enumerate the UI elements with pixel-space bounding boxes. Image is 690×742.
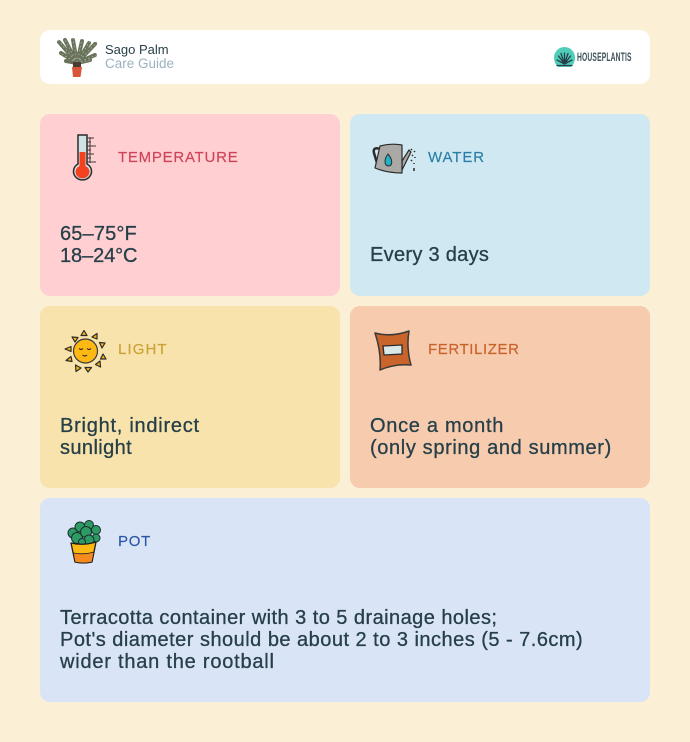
text: water frequency: Every 3 days: [370, 244, 489, 266]
title: Sago Palm: Sago Palm: [105, 42, 169, 57]
text: pot guidance: wider than the rootball: [60, 651, 275, 673]
panel: fertilizer: [350, 306, 650, 488]
heading: fertilizer: FERTILIZER: [428, 341, 520, 358]
logo wordmark: HOUSEPLANTIS: [577, 50, 632, 64]
heading: light: LIGHT: [118, 341, 168, 358]
text: pot guidance: Pot's diameter should be about 2 to 3 inches (5 - 7.6cm): [60, 629, 583, 651]
text: pot guidance: [60, 607, 583, 673]
panel: temperature: [40, 114, 340, 296]
icon: potted plant: [68, 520, 101, 564]
subtitle: Care Guide: Care Guide: [105, 56, 174, 71]
header bar: [40, 30, 650, 84]
icon: sun: [64, 330, 107, 373]
icon: Houseplantis logo: [554, 47, 575, 67]
text: light requirement: sunlight: [60, 437, 132, 459]
panel: pot: [40, 498, 650, 702]
text: fertilizer schedule: [370, 415, 612, 459]
text: fertilizer schedule: Once a month: [370, 415, 504, 437]
text: temperature range: 18–24°C: [60, 245, 137, 267]
text: temperature range: [60, 223, 137, 267]
heading: water: WATER: [428, 149, 485, 166]
text: temperature range: 65–75°F: [60, 223, 137, 245]
icon: fertilizer bag: [374, 330, 412, 371]
icon: watering can: [372, 144, 416, 174]
text: light requirement: Bright, indirect: [60, 415, 200, 437]
heading: pot: POT: [118, 533, 151, 550]
heading: temperature: TEMPERATURE: [118, 149, 238, 166]
text: fertilizer schedule: (only spring and summer): [370, 437, 612, 459]
icon: sago palm: [56, 38, 98, 77]
icon: thermometer: [72, 134, 96, 181]
panel: water: [350, 114, 650, 296]
panel: light: [40, 306, 340, 488]
text: pot guidance: Terracotta container with 3 to 5 drainage holes;: [60, 607, 497, 629]
text: light requirement: [60, 415, 200, 459]
